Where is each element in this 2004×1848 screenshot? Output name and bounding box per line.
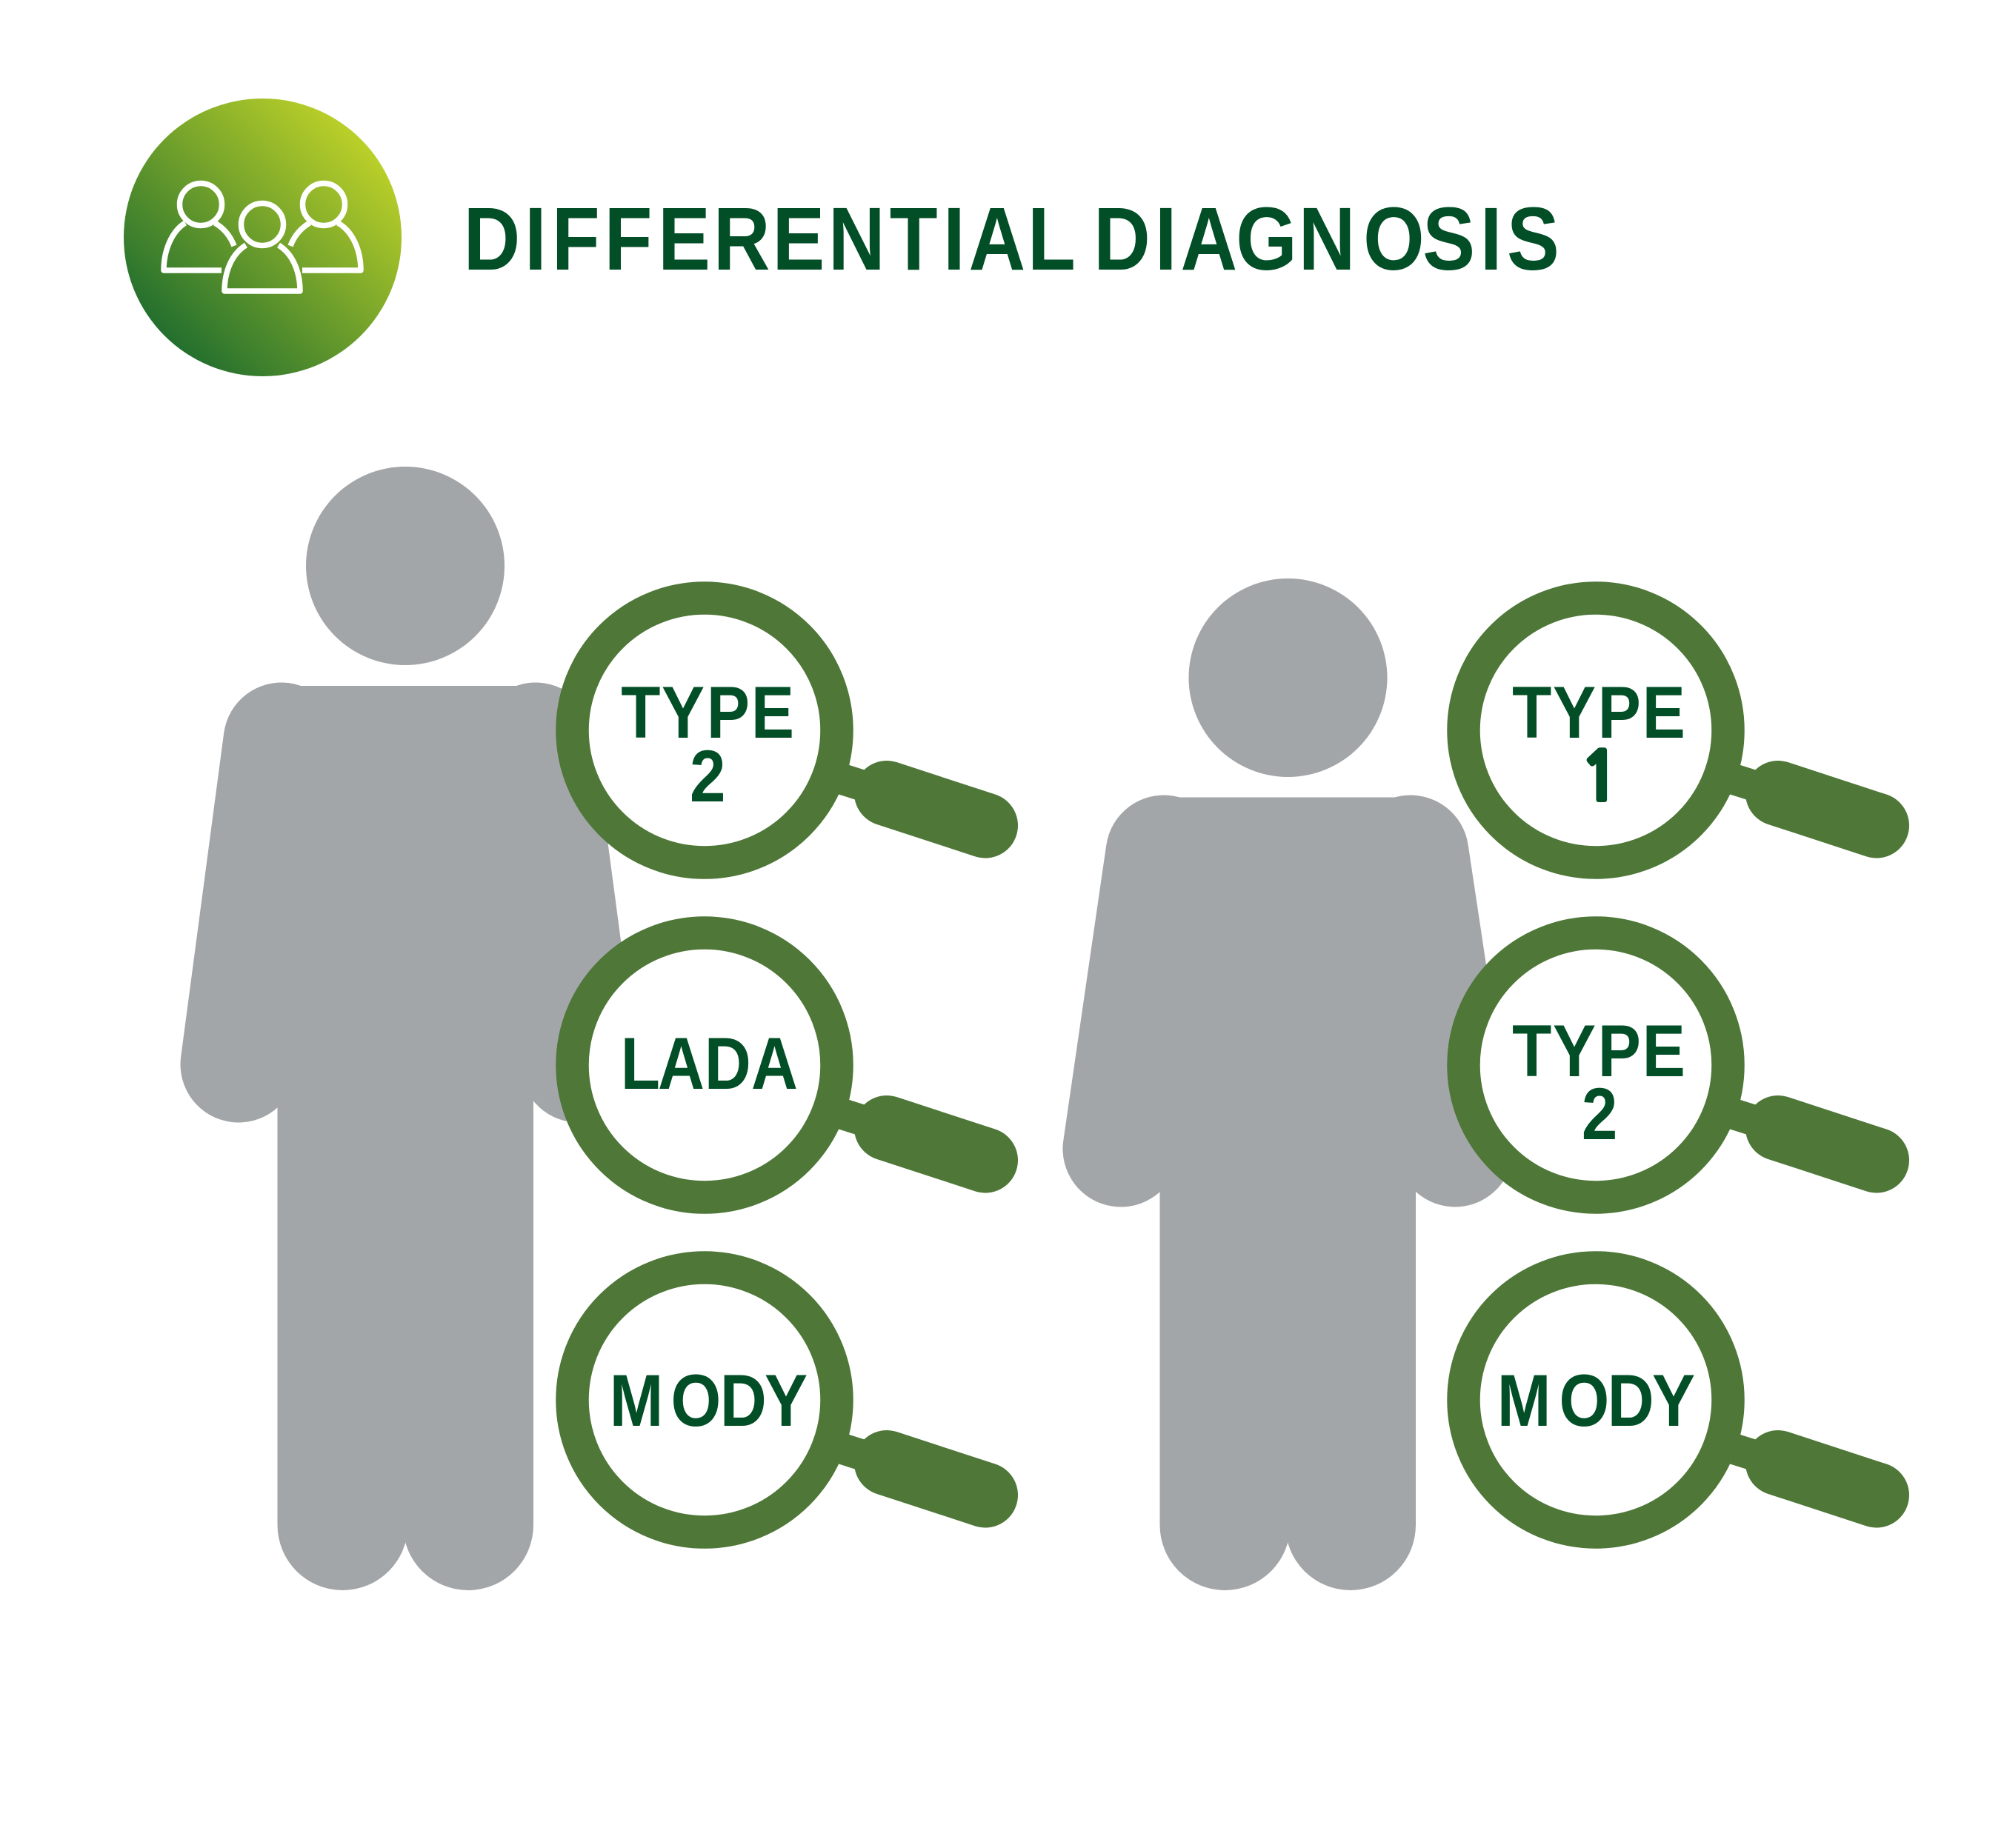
icon: group of people in gradient circle [124, 99, 402, 376]
magnifier: right column, MODY [1464, 1268, 1877, 1532]
magnifier: left column, MODY: MODY [610, 1360, 808, 1441]
magnifier: right column, TYPE 1: TYPE [1512, 672, 1685, 753]
figure: right person silhouette [1121, 578, 1455, 1590]
magnifier: left column, TYPE 2 [572, 598, 985, 862]
magnifier: left column, TYPE 2: 2 [690, 735, 725, 817]
magnifier: right column, TYPE 2: TYPE [1512, 1010, 1685, 1092]
title: DIFFERENTIAL DIAGNOSIS [464, 190, 1559, 290]
magnifier: left column, MODY [572, 1268, 985, 1532]
magnifier: right column, MODY: MODY [1497, 1360, 1695, 1441]
magnifier: right column, TYPE 2 [1464, 933, 1877, 1197]
magnifier: left column, LADA: LADA [621, 1023, 798, 1104]
magnifier: right column, TYPE 1: 1 [1579, 744, 1620, 810]
magnifier: right column, TYPE 2: 2 [1582, 1073, 1617, 1155]
magnifier: left column, TYPE 2: TYPE [621, 672, 794, 753]
figure: left person silhouette [239, 467, 579, 1590]
magnifier: left column, LADA [572, 933, 985, 1197]
magnifier: right column, TYPE 1 [1464, 598, 1877, 862]
